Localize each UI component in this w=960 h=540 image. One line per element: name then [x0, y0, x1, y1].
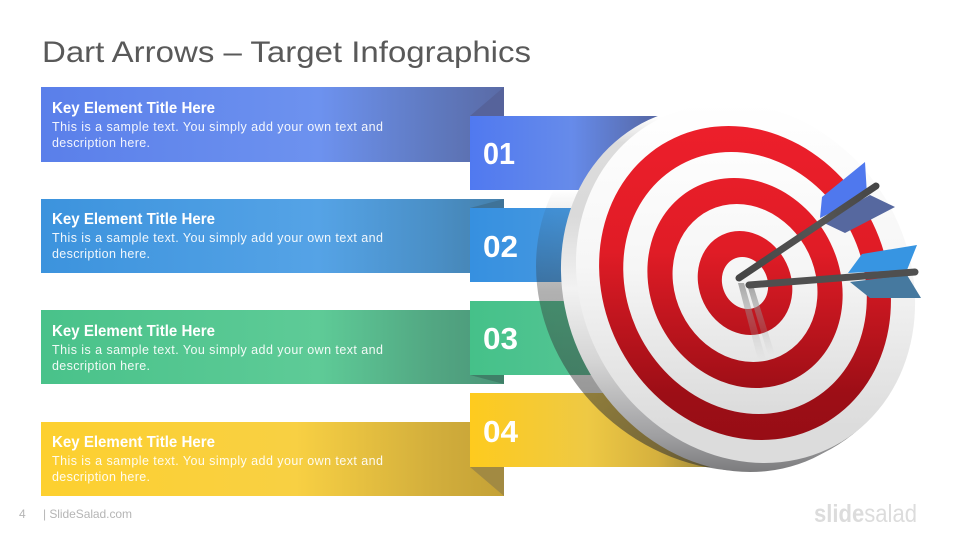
board shadow: [517, 99, 933, 471]
element 4 body: This is a sample text. You simply add your own text and: [52, 454, 383, 468]
panel: element 4: [41, 422, 504, 496]
panel: element 2: [41, 199, 504, 273]
logo wordmark: slidesalad: [814, 500, 917, 528]
element 3 body: This is a sample text. You simply add your own text and: [52, 343, 383, 357]
panel: element 1: description here.: [52, 136, 150, 150]
element 3 heading: Key Element Title Here: [52, 323, 215, 340]
panel: element 4: description here.: [52, 470, 150, 484]
element 1 heading: Key Element Title Here: [52, 100, 215, 117]
board rim: [543, 106, 919, 472]
number tab 02: 02: [483, 229, 518, 264]
number tab 03: 03: [483, 321, 518, 356]
icon: dart arrow 2: [749, 245, 921, 298]
icon: dart arrow 1: [739, 162, 895, 278]
target board: [517, 99, 933, 472]
element 4 heading: Key Element Title Here: [52, 434, 215, 451]
panel: element 1: [41, 87, 504, 162]
number tab 01: 01: [483, 136, 515, 171]
number tab 04: [470, 393, 710, 467]
element 2 body: This is a sample text. You simply add your own text and: [52, 231, 383, 245]
number tab 04: 04: [483, 414, 519, 449]
panel: element 3: [41, 310, 504, 384]
panel: element 3: description here.: [52, 359, 150, 373]
number tab 02: [470, 208, 600, 282]
arrow shadows: [738, 283, 775, 360]
number tab 03: [470, 301, 600, 375]
number tab 01: [470, 116, 670, 190]
element 2 heading: Key Element Title Here: [52, 211, 215, 228]
page number: 4: [19, 507, 26, 521]
title: Dart Arrows – Target Infographics: [42, 36, 531, 69]
panel: element 2: description here.: [52, 247, 150, 261]
footer source: | SlideSalad.com: [43, 507, 132, 521]
board rings: [558, 103, 933, 463]
element 1 body: This is a sample text. You simply add your own text and: [52, 120, 383, 134]
